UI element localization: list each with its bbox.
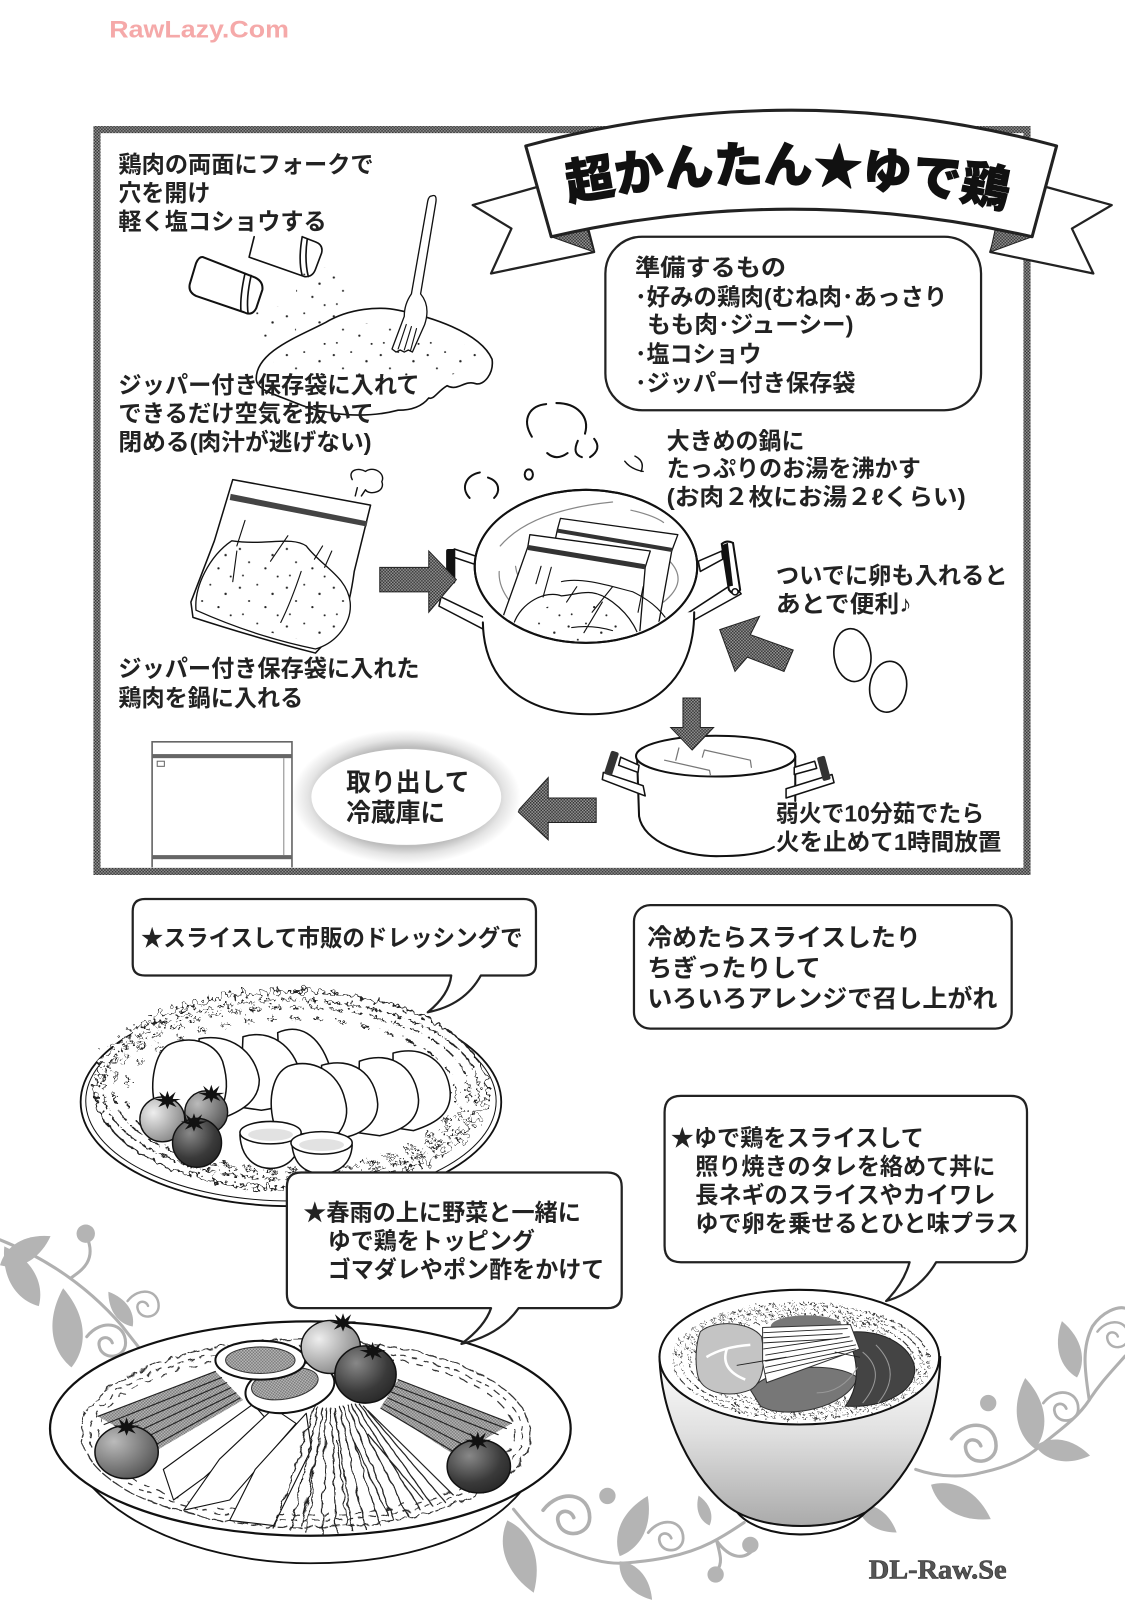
title banner [472,108,1113,275]
text: simmer and rest: 弱火で10分茹でたら [776,800,984,826]
illustration: salt and pepper shakers [189,235,347,337]
arrow: down to small pot [671,698,714,750]
illustration: steam clouds [351,403,643,498]
egg slices [215,1341,338,1420]
speech bubble: harusame salad [287,1172,622,1344]
text: eggs tip: ついでに卵も入れると [776,563,1008,589]
speech bubble: harusame salad: ★春雨の上に野菜と一緒に [303,1199,581,1225]
speech bubble: harusame salad: ゆで鶏をトッピング [328,1227,535,1254]
speech bubble: arrange ideas: ちぎったりして [647,955,821,983]
arrow: bag to pot [380,551,456,612]
bowl rim [659,1290,939,1424]
panel: ingredients box [605,237,981,410]
text: boil water: たっぷりのお湯を沸かす [667,456,921,482]
arrow: eggs to pot [720,616,793,671]
speech bubble: dressing [133,899,536,1012]
panel: ingredients box: ･塩コショウ [635,341,762,367]
speech bubble: harusame salad: ゴマダレやポン酢をかけて [328,1256,604,1283]
speech bubble: arrange ideas [634,905,1012,1029]
right handle [683,542,741,624]
banner folds [551,229,1032,252]
text: step 2 [118,372,420,455]
pot body [483,612,694,714]
water and bags [498,501,679,641]
watermark: RawLazy.Com: RawLazy.Com [109,17,289,44]
text: put bag in pot [118,656,420,711]
callout: take out to refrigerator [292,730,521,864]
text: put bag in pot: 鶏肉を鍋に入れる [118,685,303,711]
text: eggs tip [776,563,1008,617]
illustration: eggs [831,626,910,715]
panel: ingredients box: もも肉･ジューシー) [647,312,853,338]
text: step 1 [118,151,374,235]
illustration: sliced chicken plate with lettuce [81,991,501,1206]
rice [674,1304,929,1418]
text: eggs tip: あとで便利♪ [776,591,912,617]
illustration: refrigerator [152,742,292,867]
speech bubble: arrange ideas: 冷めたらスライスしたり [647,924,921,952]
chicken slices [153,1029,450,1138]
text: step 1: 軽く塩コショウする [118,209,327,235]
cabbage right [274,1404,453,1534]
left handle [439,549,494,633]
text: boil water: (お肉２枚にお湯２ℓくらい) [667,484,966,510]
speech bubble: teriyaki don: ★ゆで鶏をスライスして [671,1125,924,1151]
plate rim [81,998,501,1206]
text: step 2: 閉める(肉汁が逃げない) [118,428,372,455]
text: step 1: 鶏肉の両面にフォークで [118,151,374,177]
text: put bag in pot: ジッパー付き保存袋に入れた [118,656,420,682]
banner tail: right [990,187,1112,273]
panel: ingredients box: ･ジッパー付き保存袋 [635,370,855,396]
text: simmer and rest: 火を止めて1時間放置 [776,829,1001,855]
tomatoes [95,1313,510,1493]
vegetables edge [82,1340,531,1528]
arrow: small pot to fridge [518,778,596,840]
illustration: small pot with lid [602,736,834,856]
plate rim [50,1321,571,1536]
banner tail: left [473,187,594,273]
speech bubble: teriyaki don: 長ネギのスライスやカイワレ [695,1182,995,1208]
cabbage left [163,1404,311,1526]
text: step 2: ジッパー付き保存袋に入れて [118,372,420,398]
illustration: noodle salad plate [50,1313,571,1563]
illustration: chicken breast with fork [256,196,492,415]
title text: 超かんたん★ゆで鶏 [564,142,1010,212]
speech bubble: arrange ideas: いろいろアレンジで召し上がれ [647,984,997,1013]
text: step 2: できるだけ空気を抜いて [118,400,374,426]
callout: take out to refrigerator: 取り出して [346,769,470,797]
tomatoes [140,1085,228,1167]
sauce cups [240,1121,352,1173]
speech bubble: teriyaki don: 照り焼きのタレを絡めて丼に [695,1153,995,1179]
watermark: DL-Raw.Se: DL-Raw.Se [869,1554,1007,1585]
pot rim [475,490,697,643]
text: step 1: 穴を開け [118,180,210,206]
text: simmer and rest [776,800,1001,855]
bowl foot [737,1512,866,1534]
callout: take out to refrigerator: 冷蔵庫に [346,799,445,827]
bowl body [659,1357,940,1526]
speech bubble: dressing: ★スライスして市販のドレッシングで [141,924,523,951]
noodles left [98,1371,243,1450]
text: boil water [667,428,966,510]
plate underside [92,1480,522,1563]
speech bubble: teriyaki don: ゆで卵を乗せるとひと味プラス [695,1211,1019,1237]
panel: ingredients box: ･好みの鶏肉(むね肉･あっさり [635,284,947,310]
banner body [526,110,1057,237]
toppings [696,1315,915,1412]
panel: ingredients box: 準備するもの [635,255,786,281]
text: boil water: 大きめの鍋に [667,428,804,454]
illustration: chicken rice bowl [659,1290,940,1534]
lettuce [95,991,487,1189]
illustration: bag with chicken [191,480,371,653]
speech bubble: teriyaki don [665,1096,1027,1301]
noodles right [381,1380,511,1456]
decoration: floral vines [0,1224,1125,1600]
illustration: large pot with bags [439,490,741,714]
panel: recipe steps frame [97,130,1027,871]
